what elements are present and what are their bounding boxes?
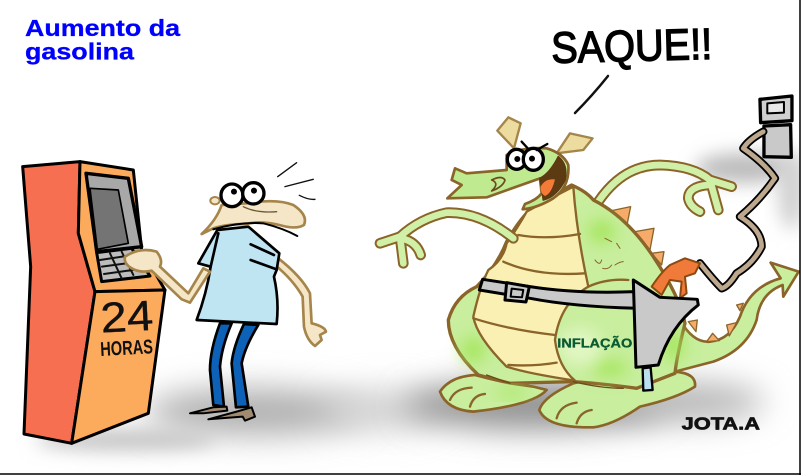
eyes (221, 183, 264, 207)
ATM screen inner (90, 188, 128, 249)
body colour patches (462, 220, 683, 377)
dragon eyes (507, 148, 543, 170)
far foot (539, 372, 695, 427)
shoes (190, 407, 255, 421)
surprise marks (278, 163, 315, 199)
title: Aumento da (25, 15, 180, 41)
speech tail (575, 76, 608, 113)
ATM upper front (78, 162, 165, 292)
ear (210, 197, 220, 204)
holster (633, 280, 698, 367)
title (25, 15, 180, 64)
left arm (380, 213, 513, 263)
near arm and hand (125, 250, 210, 303)
ATM side (23, 162, 95, 443)
left leg (210, 323, 232, 407)
far arm (275, 258, 326, 346)
tail (675, 263, 799, 372)
belt (479, 279, 637, 308)
pump head (760, 96, 792, 157)
ground shadows (35, 150, 801, 451)
near foot (440, 375, 547, 412)
foot colour patch (497, 388, 527, 397)
body (448, 185, 685, 388)
dragon (380, 96, 799, 433)
ATM label HORAS: HORAS (100, 336, 154, 361)
tail spikes (688, 303, 743, 342)
right leg (232, 324, 258, 407)
head and snout (447, 148, 568, 209)
ATM screen (86, 173, 142, 252)
title: gasolina (25, 38, 134, 64)
holster nozzle tip (643, 367, 653, 391)
fuel hose (700, 132, 775, 288)
belly (473, 187, 628, 381)
ATM keypad (97, 248, 150, 282)
ATM machine (23, 162, 165, 443)
label INFLAÇÃO: INFLAÇÃO (557, 335, 632, 350)
mouth (540, 157, 566, 200)
ATM label 24: 24 (99, 292, 154, 343)
upper right arm (598, 165, 732, 212)
light patch (558, 328, 602, 365)
signature: JOTA.A (682, 413, 761, 433)
ATM lower front (72, 290, 165, 443)
pump nozzle handle (652, 258, 700, 298)
ears (497, 117, 593, 153)
speech: SAQUE!!: SAQUE!! (551, 20, 713, 73)
back spikes (612, 207, 664, 265)
face and nose (202, 201, 305, 234)
shirt (197, 227, 279, 324)
skin marks (595, 238, 623, 269)
man (125, 163, 326, 421)
